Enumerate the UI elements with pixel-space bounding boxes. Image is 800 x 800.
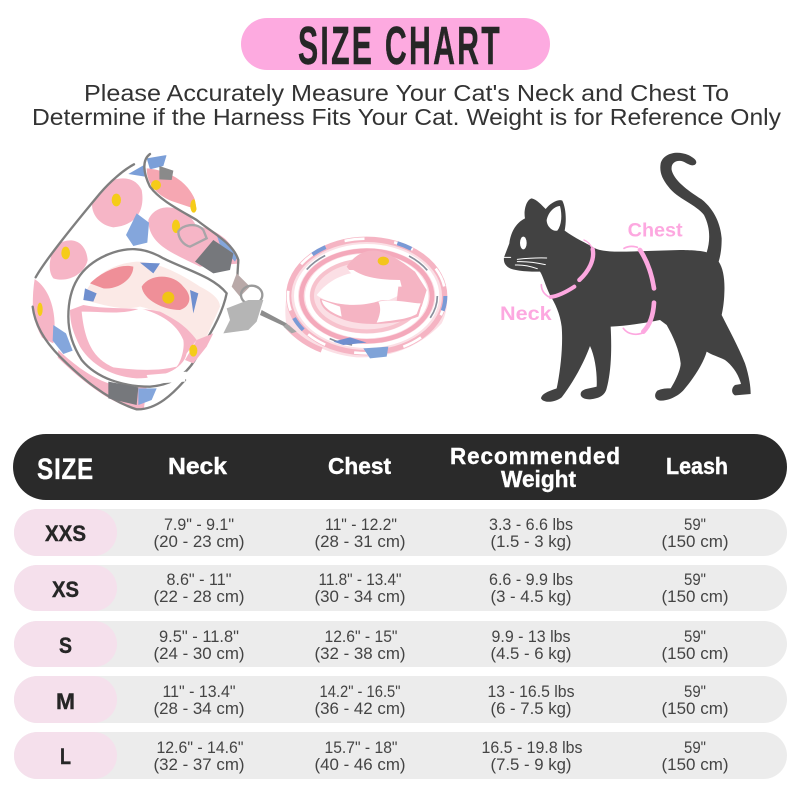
subtitle text: Determine if the Harness Fits Your Cat. Weight is for Reference Only (32, 104, 782, 130)
row: XS (14, 565, 787, 611)
blue patch (138, 388, 157, 405)
row: XS: 59" (684, 571, 706, 589)
row: L (14, 732, 787, 779)
row: M: (28 - 34 cm) (154, 700, 244, 718)
row: XXS: 7.9" - 9.1" (164, 516, 234, 534)
harness inner lining (83, 262, 220, 343)
harness grey piping (33, 154, 238, 409)
table header (13, 434, 787, 500)
row: S: (24 - 30 cm) (154, 645, 244, 663)
row: S: 59" (684, 628, 706, 646)
row: M: M (56, 689, 75, 714)
row: S: (32 - 38 cm) (314, 645, 406, 663)
leash coil (285, 239, 447, 358)
row: M: (36 - 42 cm) (314, 700, 406, 718)
row: S (14, 621, 787, 667)
row: XXS: (28 - 31 cm) (314, 533, 406, 551)
metal buckle and clip (223, 273, 297, 333)
row: M: (6 - 7.5 kg) (490, 700, 572, 718)
row: S: 12.6" - 15" (324, 628, 398, 646)
neck measure arrows (541, 240, 593, 297)
leash handle loop (347, 251, 427, 307)
row: XS: (30 - 34 cm) (314, 588, 406, 606)
row: M: 11" - 13.4" (162, 683, 236, 701)
row: XS: (3 - 4.5 kg) (490, 588, 572, 606)
row: XS: 11.8" - 13.4" (318, 571, 402, 589)
row: XS: XS (52, 577, 79, 602)
reflective strap (195, 240, 233, 273)
row: M (14, 676, 787, 723)
row: M: 13 - 16.5 lbs (488, 683, 574, 701)
cat eye (520, 237, 527, 249)
chest label: Chest (628, 221, 683, 242)
row: S: (4.5 - 6 kg) (490, 645, 572, 663)
row: S: (150 cm) (662, 645, 728, 663)
row: XXS: 59" (684, 516, 706, 534)
harness body (33, 153, 240, 409)
table header: Chest (328, 453, 391, 479)
subtitle text (32, 80, 782, 130)
leash lower band (320, 298, 423, 324)
table header: SIZE (37, 453, 94, 486)
subtitle text: Please Accurately Measure Your Cat's Neck and Chest To (84, 80, 729, 106)
chest opening (68, 249, 227, 387)
row: M: (150 cm) (662, 700, 728, 718)
harness and leash illustration (28, 153, 447, 413)
title: SIZE CHART (298, 16, 502, 76)
row: XXS: 3.3 - 6.6 lbs (489, 516, 573, 534)
row: L: 59" (684, 739, 706, 757)
chest measure arrows (623, 246, 654, 334)
row: XXS: (20 - 23 cm) (154, 533, 244, 551)
table header: Recommended (450, 443, 621, 469)
whiskers (504, 257, 547, 269)
row: XS: 8.6" - 11" (166, 571, 232, 589)
table header: Neck (168, 453, 227, 479)
row: L: (150 cm) (662, 756, 728, 774)
row: XXS: XXS (45, 521, 86, 546)
cat silhouette diagram (500, 153, 751, 402)
row: L: (7.5 - 9 kg) (490, 756, 572, 774)
leash inner hole (317, 271, 402, 305)
row: L: (32 - 37 cm) (154, 756, 244, 774)
row: M: 14.2" - 16.5" (320, 683, 401, 701)
row: S: S (59, 633, 72, 658)
row: XXS: 11" - 12.2" (325, 516, 397, 534)
row: XS: (150 cm) (662, 588, 728, 606)
row: S: 9.5" - 11.8" (159, 628, 239, 646)
cat body (504, 153, 751, 402)
row: L: L (60, 744, 71, 769)
row: S: 9.9 - 13 lbs (492, 628, 570, 646)
row: L: 12.6" - 14.6" (156, 739, 244, 757)
row: XS: (22 - 28 cm) (154, 588, 244, 606)
flower pattern (28, 155, 242, 413)
row: XXS: (150 cm) (662, 533, 728, 551)
title (241, 16, 550, 76)
neck label: Neck (500, 304, 552, 325)
row: XS: 6.6 - 9.9 lbs (489, 571, 573, 589)
table header: Weight (501, 466, 576, 492)
row: XXS (14, 509, 787, 556)
chest hole (82, 308, 184, 370)
row: XXS: (1.5 - 3 kg) (490, 533, 572, 551)
lower strap (108, 382, 138, 405)
cat ear (547, 206, 561, 231)
row: L: 15.7" - 18" (324, 739, 398, 757)
row: M: 59" (684, 683, 706, 701)
table header: Leash (666, 453, 728, 479)
D ring (178, 225, 207, 247)
row: L: (40 - 46 cm) (314, 756, 406, 774)
row: L: 16.5 - 19.8 lbs (482, 739, 582, 757)
